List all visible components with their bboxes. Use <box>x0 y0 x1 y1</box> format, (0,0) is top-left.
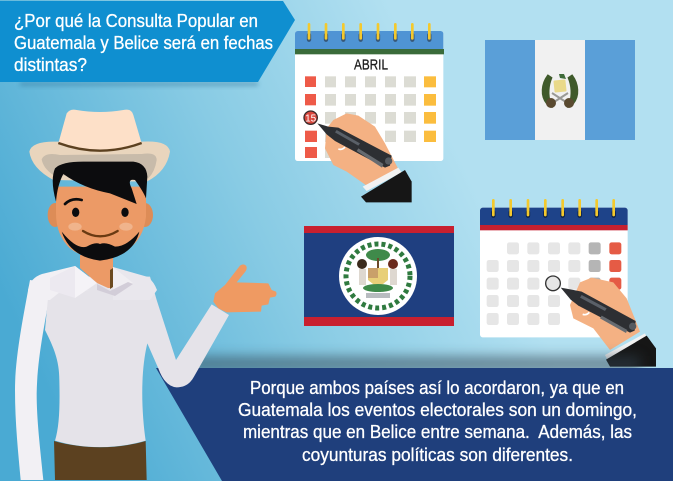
man character <box>15 110 277 480</box>
bottom answer panel <box>156 368 673 481</box>
hat brim <box>29 141 170 182</box>
flag: Belize <box>304 226 454 326</box>
header arrow with question <box>0 1 295 86</box>
header arrow with question: distintas? <box>14 55 87 75</box>
bottom answer panel: Guatemala los eventos electorales son un domingo, <box>238 399 637 420</box>
neck <box>80 255 113 288</box>
calendar: abril with writing hand: 15 <box>305 113 317 124</box>
collar <box>75 266 97 298</box>
eyebrows, eyes, cheeks and smile <box>65 199 82 204</box>
ears <box>48 203 62 227</box>
pointing hand <box>213 264 277 312</box>
bottom answer panel: coyunturas políticas son diferentes. <box>302 444 573 465</box>
hair <box>53 162 147 204</box>
bottom answer panel: mientras que en Belice entre semana. Además, las <box>243 421 632 442</box>
body lower part <box>15 277 229 480</box>
icon: Belize coat of arms <box>346 244 410 308</box>
calendar: blue with writing hand <box>480 200 656 367</box>
header arrow with question: ¿Por qué la Consulta Popular en <box>14 11 258 31</box>
icon: Guatemala coat of arms <box>543 74 577 108</box>
face <box>56 187 146 258</box>
calendar: abril with writing hand: ABRIL <box>354 56 388 73</box>
flag: Guatemala <box>485 40 635 140</box>
calendar: abril with writing hand <box>295 24 444 202</box>
header arrow with question: Guatemala y Belice será en fechas <box>14 33 273 53</box>
bottom answer panel: Porque ambos países así lo acordaron, ya que en <box>250 377 624 398</box>
head and hat <box>29 110 170 261</box>
bottom panel shadow <box>190 356 640 372</box>
hat crown <box>58 110 142 150</box>
beard <box>62 232 139 261</box>
shoulders and collar <box>28 255 157 300</box>
